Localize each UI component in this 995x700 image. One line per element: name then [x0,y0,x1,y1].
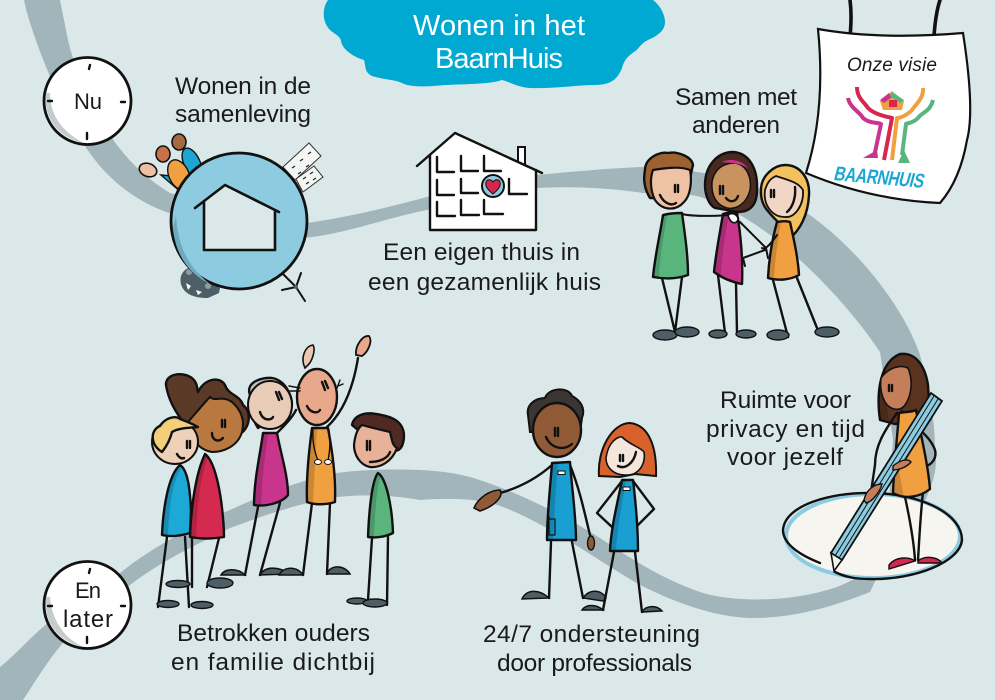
figure: care professional woman [582,423,662,612]
label: Samen met anderen: anderen [692,112,780,139]
figure: older woman in pink [221,378,296,575]
title text: BaarnHuis [435,43,563,75]
label: Een eigen thuis: een gezamenlijk huis [368,269,601,296]
clock: En later: En [75,578,101,603]
clock: En later: later [63,606,113,633]
label: Wonen in de samenleving: samenleving [175,101,311,128]
figure: woman drawing circle with pencil [783,354,962,579]
label: Betrokken ouders: en familie dichtbij [171,649,375,676]
figure: man in green [644,153,699,340]
drawn ellipse [783,493,962,579]
sign: Onze visie: BAARNHUIS [832,163,927,192]
icon: wind turbine [282,273,305,301]
arms linking [682,214,777,266]
title text [413,10,585,75]
figure: boy in blue upper body [152,417,198,536]
label: Betrokken ouders [171,620,375,676]
label: 24/7 ondersteuning [483,621,700,677]
label: Betrokken ouders: Betrokken ouders [177,620,370,647]
figure: woman in pink [705,152,757,338]
figure: waving woman in orange [279,336,370,575]
figure: boy in blue legs [157,537,213,608]
figure: young man in green [347,413,404,607]
clock: Nu: Nu [74,89,102,114]
label: Ruimte voor privacy: voor jezelf [727,444,843,471]
title cloud [324,0,665,88]
icon: apartment buildings [283,143,323,192]
logo: BaarnHuis tree [848,87,933,163]
label: Samen met anderen [675,84,797,139]
figure: blonde woman in orange [682,165,839,340]
sign: Onze visie: Onze visie [847,55,937,76]
label: Ruimte voor privacy [706,387,865,471]
clock: En later [44,562,131,648]
label: 24/7 ondersteuning: door professionals [497,650,692,677]
figure: care professional man [474,389,606,601]
icon: car [181,268,220,298]
icon: world circle with house [137,134,323,301]
label: Ruimte voor privacy: privacy en tijd [706,416,865,443]
title text: Wonen in het [413,10,585,42]
figure: woman in red [166,374,249,588]
label: Wonen in de samenleving: Wonen in de [175,73,311,100]
label: Wonen in de samenleving [175,73,311,128]
sign: Onze visie [806,0,970,203]
icon: small people [137,134,206,194]
label: Een eigen thuis: Een eigen thuis in [383,239,580,266]
icon: giant pencil [831,393,942,571]
label: 24/7 ondersteuning: 24/7 ondersteuning [483,621,700,648]
label: Ruimte voor privacy: Ruimte voor [720,387,851,414]
label: Samen met anderen: Samen met [675,84,797,111]
clock: Nu [44,58,131,144]
icon: shared house with heart [417,133,542,230]
label: Een eigen thuis [368,239,601,296]
